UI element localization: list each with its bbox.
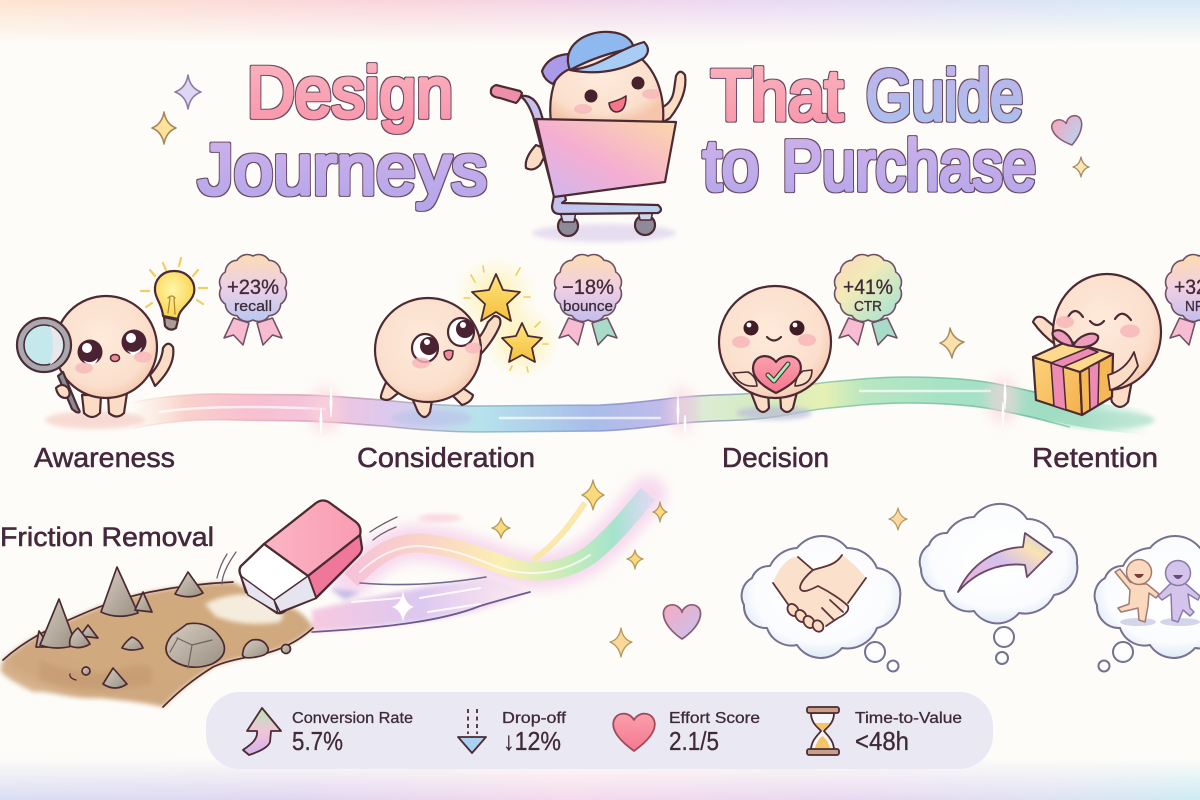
text: Drop-off 12%: ↓12% <box>503 726 561 756</box>
icon: gift box <box>1033 330 1113 415</box>
icon: bubble sparkle <box>889 508 907 530</box>
text: Conversion Rate 5.7% <box>292 710 413 756</box>
icon: shopping cart mascot <box>491 32 685 242</box>
label: Consideration: Consideration <box>357 442 535 473</box>
icon: up arrow <box>243 708 281 755</box>
icon: glowing stars <box>454 255 560 380</box>
icon: heart with check <box>753 356 801 393</box>
icon: lightbulb <box>141 258 207 330</box>
badge: -18% bounce <box>555 255 621 345</box>
icon: lavender sparkle <box>175 75 201 109</box>
icon: heart <box>613 714 655 751</box>
badge: +41% CTR: CTR <box>854 298 882 315</box>
metric: Time-to-Value <box>807 707 962 756</box>
metric: Conversion Rate <box>243 708 413 756</box>
thought bubble: community <box>1095 536 1200 672</box>
icon: small heart <box>663 605 701 639</box>
icon: title heart <box>1050 114 1087 149</box>
title word: to: to <box>703 127 759 206</box>
icon: holding-hands people <box>1115 560 1200 626</box>
badge: +23% recall: +23% <box>227 276 279 299</box>
thought bubble: handshake <box>742 536 900 672</box>
stage: Retention <box>1033 255 1200 429</box>
badge: +41% CTR <box>835 255 901 345</box>
label: Awareness: Awareness <box>34 442 175 473</box>
badge: +23% recall <box>220 255 286 345</box>
title word: That: That <box>711 57 843 136</box>
badge: -18% bounce: −18% <box>562 276 614 299</box>
title word: Journeys: Journeys <box>198 131 487 210</box>
title <box>198 54 1036 210</box>
badge: +23% recall: recall <box>234 298 272 315</box>
icon: hourglass <box>807 707 839 755</box>
label: Retention: Retention <box>1032 442 1158 473</box>
text: Drop-off 12%: Drop-off <box>502 710 567 727</box>
badge: +32% NPS <box>1166 255 1200 345</box>
bottom pastel band <box>0 765 1200 800</box>
icon: yellow sparkle <box>152 112 176 144</box>
metric: Drop-off <box>458 709 567 756</box>
stage: Awareness <box>17 255 286 429</box>
panel: metrics bar <box>206 692 993 769</box>
title word: Purchase: Purchase <box>782 127 1036 206</box>
title word: Design: Design <box>247 54 453 133</box>
metric: Effort Score <box>613 710 760 756</box>
sparkles <box>492 480 667 657</box>
thought bubble: arrow <box>920 504 1077 664</box>
dirt ground <box>0 582 313 707</box>
icon: title sparkle <box>1073 157 1089 177</box>
text: Drop-off 12% <box>502 710 567 756</box>
panel: friction removal scene <box>0 480 701 707</box>
text: Effort Score 2.1/5: Effort Score <box>669 710 760 727</box>
badge: -18% bounce: bounce <box>563 298 613 315</box>
icon: down arrow <box>458 709 486 753</box>
label: Friction Removal: Friction Removal <box>0 522 214 552</box>
stage: Consideration <box>375 255 621 426</box>
text: Time-to-Value 48h <box>855 710 962 756</box>
text: Effort Score 2.1/5: 2.1/5 <box>669 726 719 756</box>
icon: handshake <box>773 555 866 634</box>
text: Time-to-Value 48h: <48h <box>855 726 909 756</box>
text: Time-to-Value 48h: Time-to-Value <box>855 710 962 727</box>
icon: magnifying glass <box>17 318 80 412</box>
icon: white sparkle <box>392 591 414 622</box>
journey path <box>134 376 1150 434</box>
rainbow swoosh <box>312 494 648 632</box>
rocks and spikes <box>36 567 290 688</box>
badge: +41% CTR: +41% <box>843 276 893 299</box>
text: Effort Score 2.1/5 <box>669 710 760 756</box>
text: Conversion Rate 5.7%: 5.7% <box>292 726 343 756</box>
stage: Decision <box>719 255 901 420</box>
icon: curved arrow <box>958 533 1052 592</box>
top pastel band <box>0 0 1200 36</box>
icon: path sparkle <box>940 328 964 358</box>
icon: eraser <box>240 500 362 613</box>
text: Conversion Rate 5.7%: Conversion Rate <box>292 710 413 727</box>
title word: Guide: Guide <box>866 57 1023 136</box>
label: Decision: Decision <box>722 442 829 473</box>
